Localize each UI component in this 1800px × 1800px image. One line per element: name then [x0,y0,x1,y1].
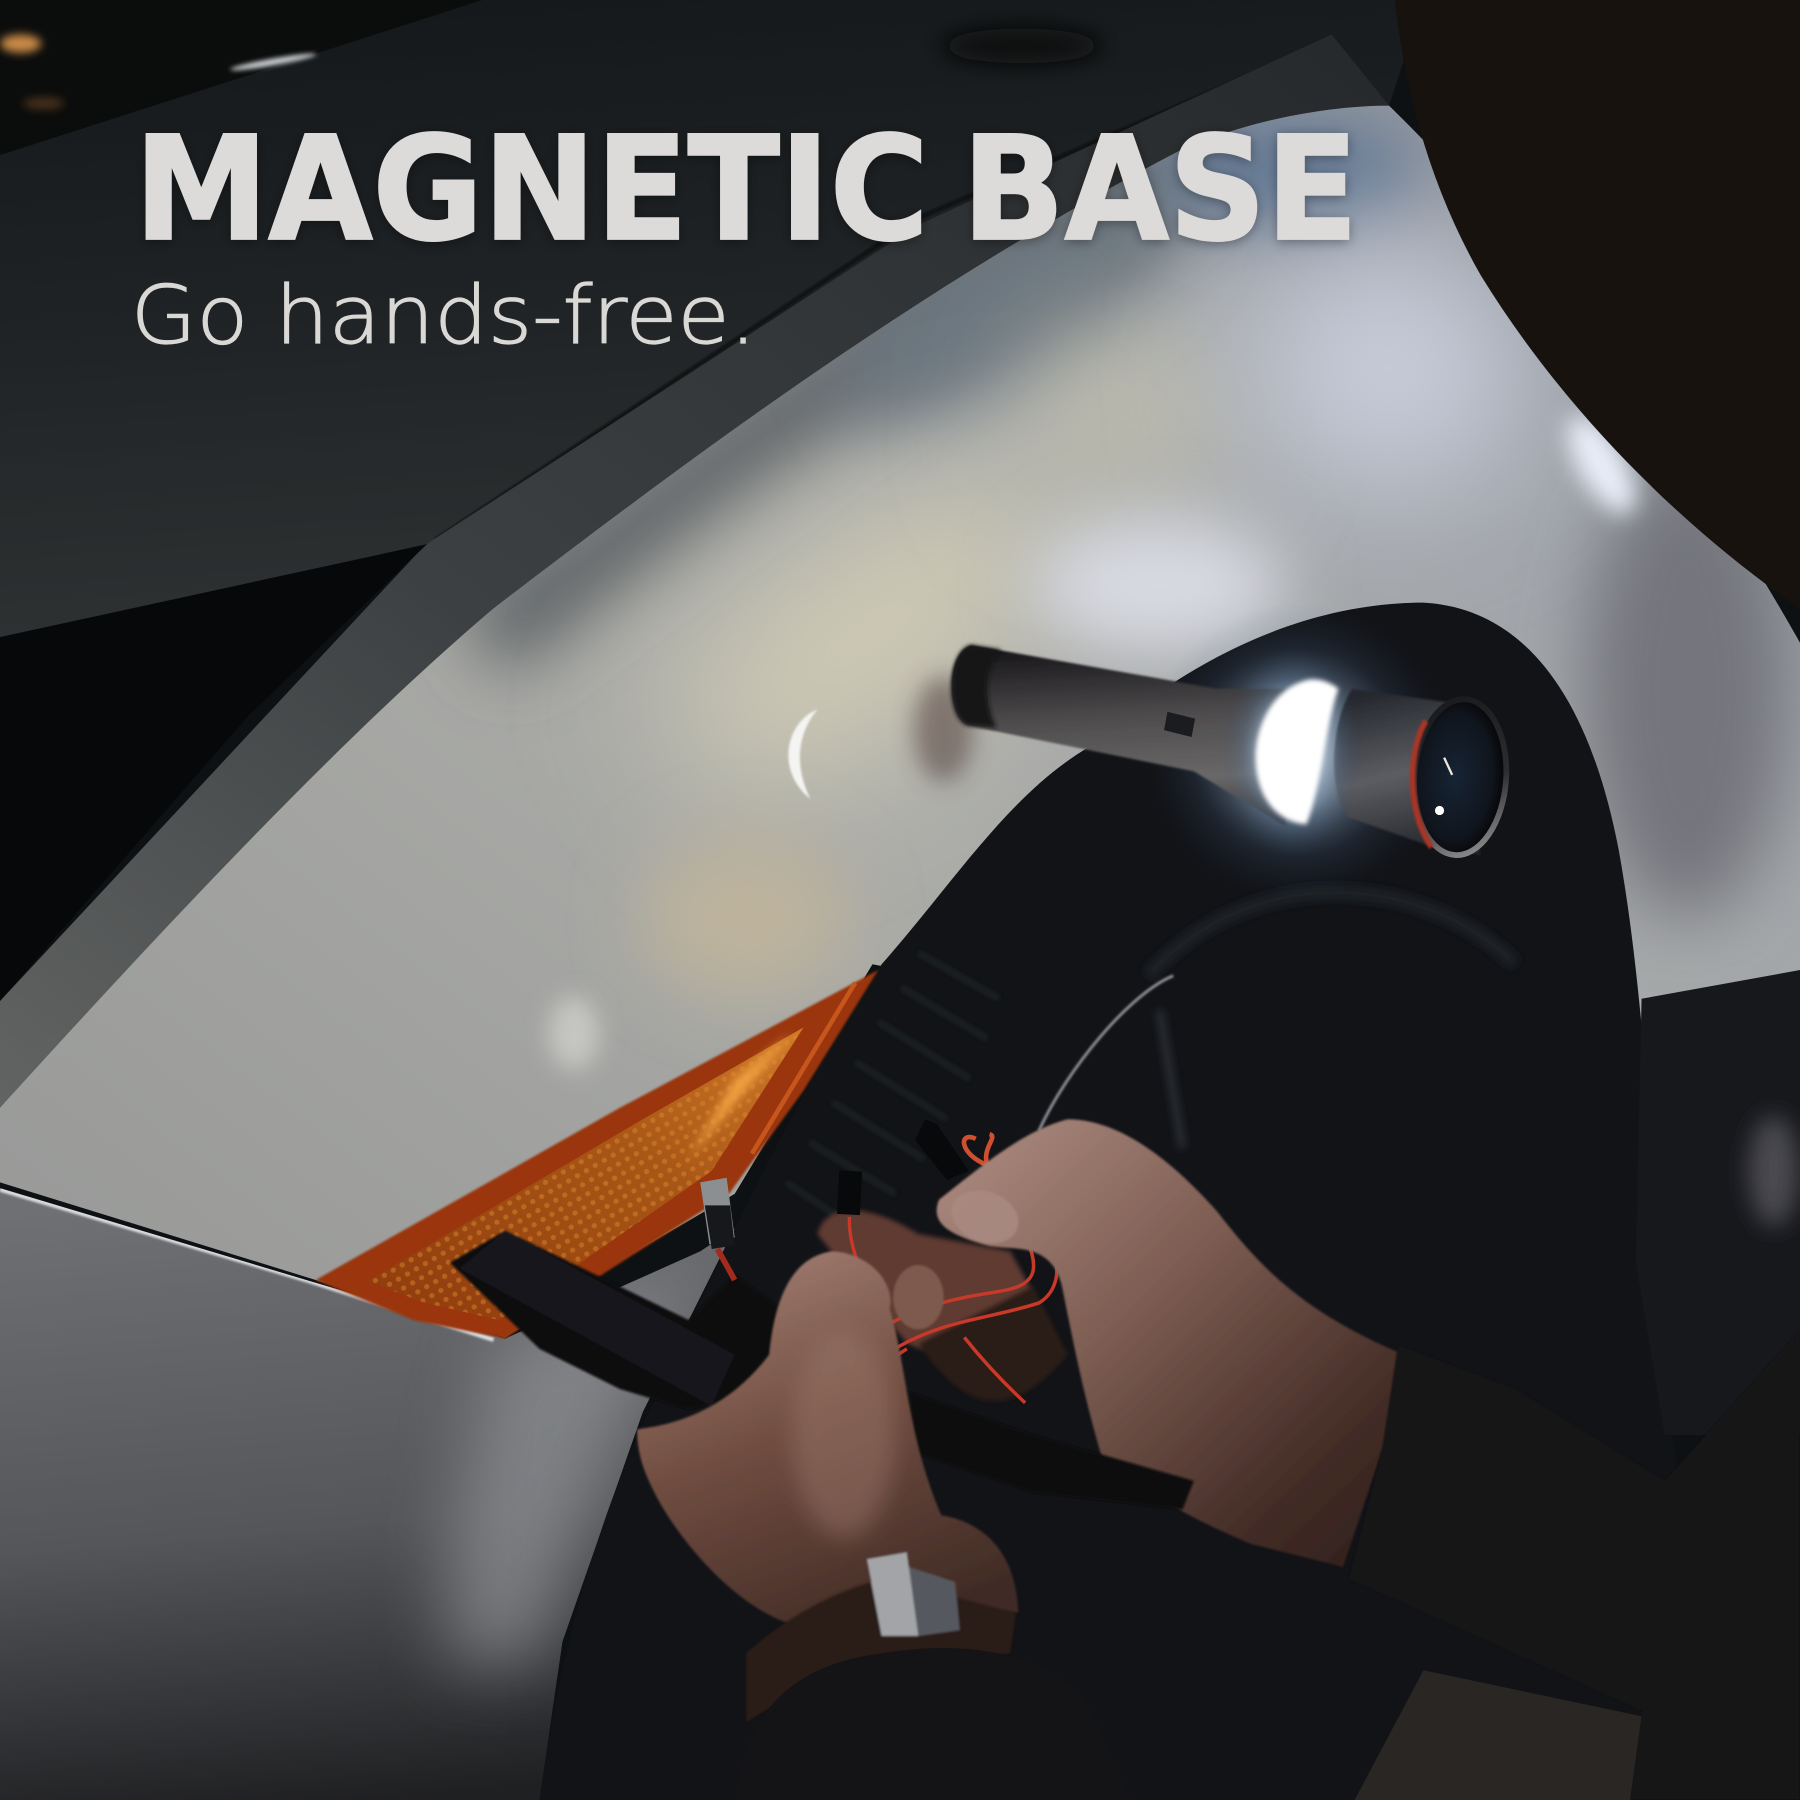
crescent reflection [788,709,817,799]
orange side reflector [316,970,878,1339]
lower dark bar [884,1383,1194,1510]
black panel held in hands [450,1231,781,1410]
connector left [700,1178,735,1280]
fender [0,106,1800,1338]
watch [746,1552,1016,1722]
right hand [937,1119,1398,1567]
flashlight base shadow [914,676,973,782]
lamp COB strip [1256,679,1339,824]
title: MAGNETIC [134,106,929,273]
right sleeve [1349,1332,1800,1800]
flashlight red ring [1413,721,1432,847]
black window [0,544,427,1001]
wheel arch and tyre [540,603,1722,1800]
lower car panel [0,1188,735,1800]
connector middle [837,1170,862,1215]
lens glints [1444,758,1452,775]
left hand [637,1251,1018,1624]
flashlight switch [1164,712,1195,737]
left sleeve [735,1648,1131,1800]
flashlight end cap [952,645,1001,728]
title: BASE [962,106,1358,273]
floor corner [1355,1670,1642,1800]
subtitle: Go hands-free. [131,268,757,362]
gray body band [0,34,1389,1108]
right side dark mudguard [1636,970,1800,1435]
right side glint [1748,1116,1799,1226]
flashlight lens [1409,696,1511,858]
title [134,106,1358,273]
right hand fingers behind [817,1210,1068,1401]
red wires [849,1134,1057,1403]
flashlight body [951,645,1286,827]
car hood panel [0,0,1423,637]
person head blur [1395,0,1800,608]
flashlight head [1334,689,1481,855]
lamp outer halo [1148,603,1446,901]
flashlight [914,603,1511,901]
connector right [915,1119,969,1180]
lamp inner glow [1220,649,1363,855]
top-left reflections [0,34,317,109]
